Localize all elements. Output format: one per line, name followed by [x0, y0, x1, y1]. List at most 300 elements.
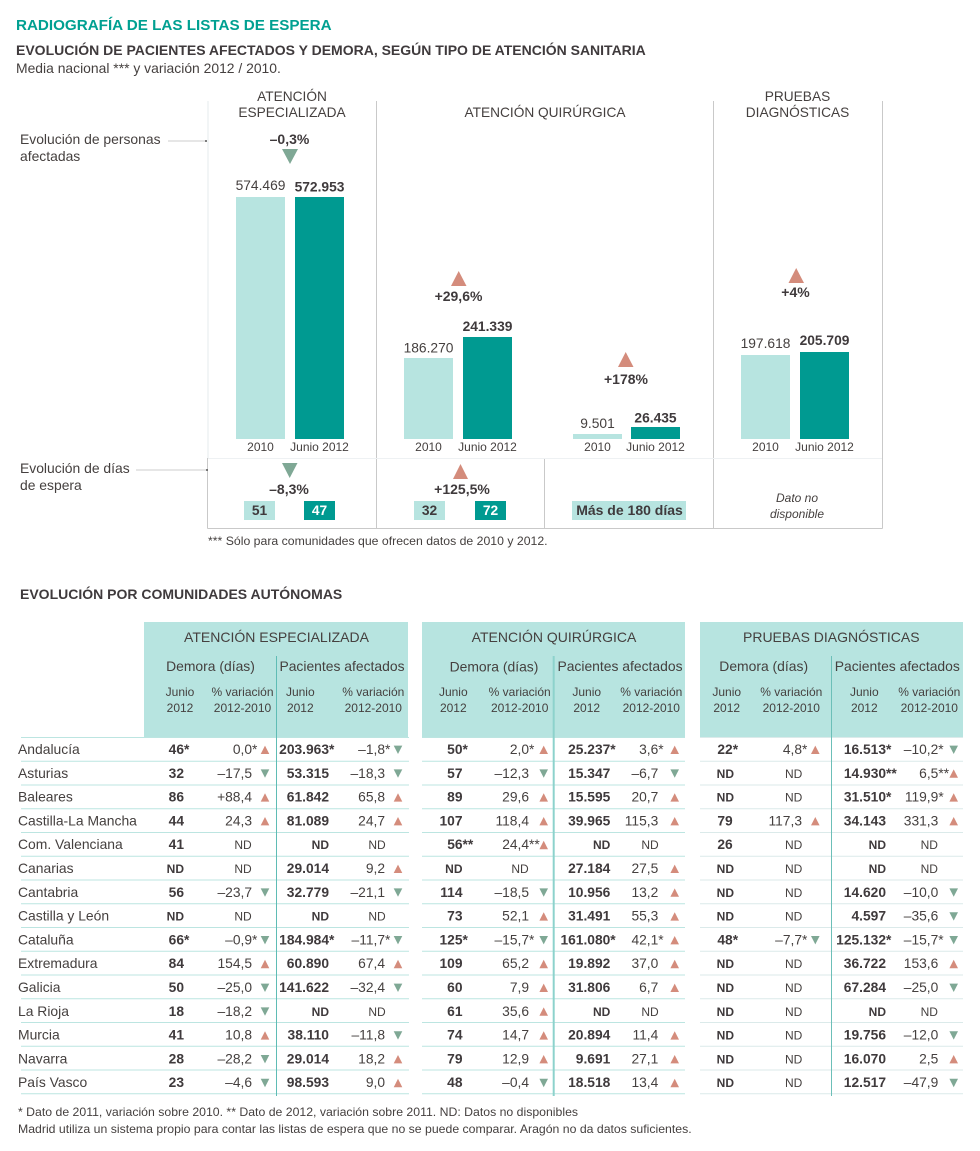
row: Andalucía: 46* — [169, 742, 190, 757]
row: Castilla-La Mancha: 39.965 — [568, 813, 611, 828]
row: Extremadura: 67,4 — [358, 956, 385, 971]
row: Murcia — [18, 1027, 958, 1043]
table header: atención especializada: Junio — [286, 685, 315, 699]
column heading: atención quirúrgica: ATENCIÓN QUIRÚRGICA — [465, 105, 626, 120]
row: Galicia: 6,7 — [639, 980, 658, 995]
row: Navarra: 18,2 — [358, 1051, 385, 1066]
row: Castilla y León: 4.597 — [851, 909, 886, 924]
row: La Rioja: –18,2 — [217, 1004, 252, 1019]
bar chart: pruebas diagnósticas: Junio 2012 — [795, 440, 854, 454]
row: Galicia: –25,0 — [904, 980, 939, 995]
row: Cantabria: –21,1 — [350, 885, 385, 900]
row: Canarias: ND — [921, 862, 938, 876]
footnotes: Madrid utiliza un sistema propio para contar las listas de espera que no se puede comparar. Aragón no da datos suficientes. — [18, 1122, 692, 1136]
row: Castilla-La Mancha: Castilla-La Mancha — [18, 812, 137, 828]
row: Castilla y León: ND — [167, 910, 184, 924]
row: Navarra: 9.691 — [576, 1051, 611, 1066]
row: Canarias: ND — [167, 862, 184, 876]
row: País Vasco: –0,4 — [502, 1075, 529, 1090]
row: País Vasco: –47,9 — [904, 1075, 939, 1090]
row: Extremadura: 60.890 — [287, 956, 329, 971]
row: Com. Valenciana: Com. Valenciana — [18, 836, 123, 852]
row: Extremadura: ND — [785, 957, 803, 971]
bar chart: atención quirúrgica, segunda serie: 26.435 — [634, 410, 677, 426]
row: Cantabria: –23,7 — [217, 885, 252, 900]
row: Extremadura: 153,6 — [904, 956, 939, 971]
row: Castilla y León: ND — [785, 910, 803, 924]
table header: atención especializada: Junio — [166, 685, 195, 699]
bar chart: atención quirúrgica: 2010 — [415, 440, 442, 454]
row: Galicia: 60 — [447, 980, 463, 995]
row: Galicia: ND — [717, 981, 734, 995]
row: Castilla-La Mancha: 118,4 — [495, 813, 529, 828]
row: Com. Valenciana: ND — [641, 838, 659, 852]
row: Canarias: ND — [785, 862, 803, 876]
row: Castilla y León: 55,3 — [631, 909, 659, 924]
row: Andalucía: 4,8* — [783, 742, 808, 757]
row: Com. Valenciana: ND — [368, 838, 386, 852]
row: Extremadura: ND — [717, 957, 734, 971]
row: Cataluña — [18, 931, 958, 947]
row: Cantabria: –10,0 — [904, 885, 939, 900]
row: Navarra: 28 — [169, 1051, 184, 1066]
días de espera: atención quirúrgica: +125,5% — [434, 481, 490, 497]
row: Baleares: 89 — [447, 790, 463, 805]
row: Com. Valenciana: ND — [593, 838, 611, 852]
row: Cataluña: –0,9* — [225, 932, 258, 947]
días de espera: atención especializada — [244, 463, 335, 520]
row: Andalucía: 203.963* — [279, 742, 335, 757]
row: Cataluña: –11,7* — [352, 932, 391, 947]
row: Asturias: 15.347 — [568, 766, 611, 781]
row: Baleares: 86 — [169, 790, 184, 805]
row: Cantabria: ND — [785, 886, 803, 900]
row: Baleares: 65,8 — [358, 790, 385, 805]
subtitle heading: EVOLUCIÓN DE PACIENTES AFECTADOS Y DEMORA, SEGÚN TIPO DE ATENCIÓN SANITARIA — [16, 41, 646, 58]
table header: atención quirúrgica: Junio — [439, 685, 468, 699]
bar chart: atención especializada: Junio 2012 — [290, 440, 349, 454]
row: Canarias: ND — [869, 862, 886, 876]
row: Cantabria: 14.620 — [844, 885, 886, 900]
días de espera: atención especializada: 47 — [312, 503, 327, 518]
row: País Vasco: 12.517 — [844, 1075, 886, 1090]
row: Castilla-La Mancha: 81.089 — [287, 813, 329, 828]
row: Navarra — [18, 1050, 958, 1066]
footnotes: * Dato de 2011, variación sobre 2010. ** Dato de 2012, variación sobre 2011. ND: Datos no disponibles — [18, 1105, 578, 1119]
table header: atención quirúrgica: 2012-2010 — [623, 701, 680, 715]
row: Com. Valenciana: 26 — [717, 837, 733, 852]
row: Castilla y León: 31.491 — [568, 909, 611, 924]
row: Navarra: 12,9 — [502, 1051, 529, 1066]
row: Cantabria: 32.779 — [287, 885, 329, 900]
row: País Vasco: ND — [785, 1076, 803, 1090]
row: Galicia: Galicia — [18, 979, 61, 995]
table header: atención quirúrgica — [422, 622, 685, 738]
row: Baleares: +88,4 — [217, 790, 252, 805]
row: Extremadura: 37,0 — [631, 956, 659, 971]
table header: atención quirúrgica: Junio — [572, 685, 601, 699]
row: Canarias: ND — [234, 862, 252, 876]
row: Cantabria: –18,5 — [494, 885, 529, 900]
footnotes — [18, 1105, 692, 1136]
row: Castilla y León: ND — [368, 910, 386, 924]
row: Canarias: 9,2 — [366, 861, 385, 876]
row: Navarra: ND — [717, 1052, 734, 1066]
table header: atención especializada: 2012-2010 — [345, 701, 402, 715]
row: La Rioja: ND — [641, 1005, 659, 1019]
table header: pruebas diagnósticas: Junio — [850, 685, 879, 699]
bar chart: pruebas diagnósticas: 197.618 — [741, 336, 791, 351]
row: Canarias: ND — [445, 862, 463, 876]
row: Galicia: –25,0 — [217, 980, 252, 995]
row: Cataluña: –7,7* — [775, 932, 808, 947]
table header: atención quirúrgica: ATENCIÓN QUIRÚRGICA — [472, 629, 637, 645]
row: Canarias: Canarias — [18, 860, 74, 876]
días de espera: atención especializada: 51 — [252, 503, 267, 518]
row: Cataluña: 125.132* — [836, 932, 892, 947]
row: Murcia: ND — [785, 1029, 803, 1043]
row: Navarra: 2,5 — [919, 1051, 939, 1066]
row: País Vasco: 18.518 — [568, 1075, 611, 1090]
row: País Vasco: 23 — [169, 1075, 184, 1090]
bar chart: atención especializada: –0,3% — [270, 131, 310, 147]
row: Murcia: 10,8 — [225, 1028, 252, 1043]
bar chart: atención quirúrgica: +29,6% — [435, 288, 483, 304]
row: Cantabria: 56 — [169, 885, 184, 900]
row: Castilla y León: 52,1 — [502, 909, 529, 924]
row: La Rioja: ND — [717, 1005, 734, 1019]
bar chart: pruebas diagnósticas: 2010 — [752, 440, 779, 454]
row: Baleares — [18, 789, 958, 805]
row: La Rioja: 61 — [447, 1004, 463, 1019]
table header: pruebas diagnósticas: Junio — [712, 685, 741, 699]
row: Castilla-La Mancha: 44 — [169, 813, 184, 828]
row: Baleares: 20,7 — [631, 790, 658, 805]
table header: pruebas diagnósticas: 2012-2010 — [901, 701, 958, 715]
row: País Vasco: 9,0 — [366, 1075, 385, 1090]
row: Canarias: 27,5 — [631, 861, 659, 876]
row: Asturias: 53.315 — [287, 766, 329, 781]
row: Murcia: 14,7 — [502, 1028, 529, 1043]
row: Cataluña: 161.080* — [560, 932, 616, 947]
row: Castilla-La Mancha — [18, 812, 958, 828]
row: Asturias: 14.930** — [844, 766, 897, 781]
row: Galicia — [18, 979, 958, 995]
row: Com. Valenciana: ND — [234, 838, 252, 852]
row: Baleares: 15.595 — [568, 790, 611, 805]
row: Navarra: 79 — [447, 1051, 463, 1066]
días de espera: atención quirúrgica — [414, 464, 506, 520]
row: La Rioja: La Rioja — [18, 1003, 69, 1019]
row: Com. Valenciana: ND — [869, 838, 886, 852]
table header: pruebas diagnósticas: Pacientes afectados — [835, 658, 960, 674]
row: La Rioja: ND — [921, 1005, 938, 1019]
row: Cantabria: Cantabria — [18, 884, 79, 900]
row: Andalucía: 16.513* — [844, 742, 892, 757]
row: Asturias: 57 — [447, 766, 463, 781]
row: La Rioja: ND — [593, 1005, 611, 1019]
row: Castilla-La Mancha: 34.143 — [844, 813, 886, 828]
row: Baleares: Baleares — [18, 789, 73, 805]
row: La Rioja: ND — [368, 1005, 386, 1019]
row: Castilla y León: 73 — [447, 909, 463, 924]
row: Asturias — [18, 765, 958, 781]
row: La Rioja: ND — [785, 1005, 803, 1019]
table header: atención especializada: ATENCIÓN ESPECIALIZADA — [184, 629, 370, 645]
row: Castilla-La Mancha: 107 — [439, 813, 463, 828]
row: Murcia: 19.756 — [844, 1028, 886, 1043]
bar chart: atención quirúrgica — [404, 271, 517, 454]
row: Baleares: 119,9* — [905, 790, 944, 805]
row: Cataluña: 66* — [169, 932, 190, 947]
row: Baleares: ND — [785, 791, 803, 805]
row: Navarra: 27,1 — [631, 1051, 658, 1066]
row: Asturias: 6,5** — [919, 766, 950, 781]
row: Cataluña: –15,7* — [494, 932, 535, 947]
heading: comunidades autónomas: EVOLUCIÓN POR COMUNIDADES AUTÓNOMAS — [20, 585, 342, 602]
bar chart: atención quirúrgica, segunda serie: 2010 — [584, 440, 611, 454]
row: País Vasco: 98.593 — [287, 1075, 329, 1090]
row: Galicia: 50 — [169, 980, 184, 995]
label: días de espera: Evolución de días — [20, 460, 130, 476]
row: Andalucía: 0,0* — [233, 742, 258, 757]
row: Murcia: 11,4 — [632, 1028, 659, 1043]
row: Asturias: –6,7 — [631, 766, 658, 781]
bar chart: atención quirúrgica: Junio 2012 — [458, 440, 517, 454]
table header: atención quirúrgica: Demora (días) — [450, 658, 538, 674]
row: Com. Valenciana: ND — [785, 838, 803, 852]
row: Castilla-La Mancha: 115,3 — [625, 813, 659, 828]
row: Castilla-La Mancha: 24,3 — [225, 813, 252, 828]
row: Murcia: 38.110 — [288, 1028, 329, 1043]
table header: atención especializada: Demora (días) — [166, 658, 255, 674]
bar chart: atención quirúrgica: 186.270 — [404, 340, 454, 356]
row: Extremadura — [18, 955, 958, 971]
row: Castilla y León: –35,6 — [904, 909, 939, 924]
column heading: atención especializada: ESPECIALIZADA — [238, 105, 346, 120]
bar chart: pruebas diagnósticas: +4% — [781, 284, 810, 300]
row: Andalucía: 22* — [717, 742, 739, 757]
row: Castilla-La Mancha: 24,7 — [358, 813, 385, 828]
row: Com. Valenciana: 56** — [447, 837, 474, 852]
días de espera: atención especializada: –8,3% — [269, 481, 309, 497]
bar chart: pruebas diagnósticas: 205.709 — [800, 333, 850, 348]
row: Galicia: 31.806 — [568, 980, 611, 995]
row: Navarra: 16.070 — [844, 1051, 886, 1066]
row: Baleares: 29,6 — [502, 790, 529, 805]
label: personas afectadas: Evolución de personas — [20, 131, 161, 147]
row: Cantabria: 13,2 — [631, 885, 658, 900]
table header: pruebas diagnósticas — [700, 622, 963, 738]
bar chart: atención quirúrgica, segunda serie: Junio 2012 — [626, 440, 685, 454]
días de espera: más de 180 días: Más de 180 días — [576, 502, 683, 518]
row: Castilla y León: Castilla y León — [18, 908, 109, 924]
table header: pruebas diagnósticas: 2012 — [713, 701, 740, 715]
row: Asturias: ND — [785, 767, 803, 781]
footnote: chart: *** Sólo para comunidades que ofrecen datos de 2010 y 2012. — [208, 534, 548, 548]
row: Extremadura: 154,5 — [217, 956, 252, 971]
row: Asturias: 32 — [169, 766, 184, 781]
row: Canarias: 27.184 — [568, 861, 611, 876]
column heading: pruebas diagnósticas: PRUEBAS — [765, 89, 830, 104]
row: La Rioja: 18 — [169, 1004, 184, 1019]
días de espera: dato no disponible: Dato no — [776, 491, 818, 505]
row: Murcia: 41 — [169, 1028, 184, 1043]
column heading: atención especializada — [238, 89, 346, 120]
row: Cantabria — [18, 884, 958, 900]
column heading: pruebas diagnósticas: DIAGNÓSTICAS — [746, 105, 849, 120]
row: Cataluña: Cataluña — [18, 931, 74, 947]
row: Andalucía: 2,0* — [510, 742, 535, 757]
row: Galicia: 7,9 — [510, 980, 529, 995]
bar chart: atención quirúrgica, segunda serie — [573, 352, 685, 454]
row: País Vasco: 48 — [447, 1075, 463, 1090]
row: Cantabria: ND — [717, 886, 734, 900]
row: Extremadura: 65,2 — [502, 956, 529, 971]
row: Andalucía: –10,2* — [904, 742, 944, 757]
row: Com. Valenciana: 41 — [169, 837, 184, 852]
row: Navarra: –28,2 — [217, 1051, 252, 1066]
row: La Rioja: ND — [312, 1005, 329, 1019]
row: Cataluña: 184.984* — [279, 932, 335, 947]
row: Andalucía: 50* — [447, 742, 469, 757]
subtitle note: Media nacional *** y variación 2012 / 2010. — [16, 60, 281, 76]
table header: atención quirúrgica: % variación — [489, 685, 551, 699]
column heading: atención especializada: ATENCIÓN — [257, 89, 327, 104]
bar chart: atención quirúrgica, segunda serie: 9.501 — [580, 416, 615, 431]
row: Andalucía: 3,6* — [639, 742, 664, 757]
row: Extremadura: 109 — [439, 956, 463, 971]
row: Extremadura: 19.892 — [568, 956, 611, 971]
row: Com. Valenciana: ND — [921, 838, 938, 852]
row: País Vasco: –4,6 — [225, 1075, 252, 1090]
table header: atención quirúrgica: % variación — [620, 685, 682, 699]
row: País Vasco: País Vasco — [18, 1074, 88, 1090]
row: Andalucía: –1,8* — [358, 742, 391, 757]
row: Andalucía: 25.237* — [568, 742, 616, 757]
row: País Vasco: 13,4 — [631, 1075, 659, 1090]
row: Murcia: ND — [717, 1029, 734, 1043]
row: Asturias: Asturias — [18, 765, 68, 781]
table header: atención quirúrgica: 2012 — [573, 701, 600, 715]
row: La Rioja — [18, 1003, 938, 1019]
row: Cataluña: 125* — [440, 932, 469, 947]
row: Murcia: –12,0 — [904, 1028, 939, 1043]
bar chart: pruebas diagnósticas — [741, 268, 854, 454]
row: Asturias: ND — [717, 767, 734, 781]
row: Canarias: ND — [511, 862, 529, 876]
table header: pruebas diagnósticas: Demora (días) — [719, 658, 808, 674]
row: Murcia: Murcia — [18, 1027, 60, 1043]
row: Galicia: 67.284 — [844, 980, 886, 995]
bar chart: atención especializada: 2010 — [247, 440, 274, 454]
row: Navarra: ND — [785, 1052, 803, 1066]
row: Navarra: Navarra — [18, 1050, 68, 1066]
row: Castilla-La Mancha: 331,3 — [904, 813, 939, 828]
row: Murcia: –11,8 — [351, 1028, 385, 1043]
row: Cantabria: 114 — [440, 885, 463, 900]
bar chart: atención quirúrgica: 241.339 — [463, 319, 513, 334]
bar chart: atención especializada: 574.469 — [236, 178, 286, 193]
table header: atención especializada: 2012 — [287, 701, 314, 715]
row: Castilla y León: ND — [234, 910, 252, 924]
row: Navarra: 29.014 — [287, 1051, 329, 1066]
table header: atención especializada: 2012-2010 — [214, 701, 272, 715]
row: Andalucía: Andalucía — [18, 741, 80, 757]
row: Baleares: ND — [717, 791, 734, 805]
row: Castilla-La Mancha: 79 — [717, 813, 733, 828]
row: Com. Valenciana: 24,4** — [502, 837, 540, 852]
row: Baleares: 31.510* — [844, 790, 892, 805]
row: Extremadura: 84 — [169, 956, 184, 971]
bar chart: atención especializada: 572.953 — [295, 180, 345, 194]
panel: national chart — [20, 89, 882, 528]
row: La Rioja: 35,6 — [502, 1004, 529, 1019]
table header: atención especializada: % variación — [211, 685, 274, 699]
row: Asturias: –18,3 — [350, 766, 385, 781]
row: Murcia: 20.894 — [568, 1028, 611, 1043]
row: País Vasco — [18, 1074, 958, 1090]
table header: atención especializada — [144, 622, 408, 738]
table header: pruebas diagnósticas: PRUEBAS DIAGNÓSTICAS — [743, 629, 920, 645]
label: personas afectadas: afectadas — [20, 148, 80, 164]
días de espera: atención quirúrgica: 72 — [483, 503, 498, 518]
row: Com. Valenciana — [18, 836, 938, 852]
table header: pruebas diagnósticas: % variación — [760, 685, 822, 699]
días de espera: atención quirúrgica: 32 — [422, 503, 437, 518]
row: Galicia: –32,4 — [350, 980, 385, 995]
table header: pruebas diagnósticas: % variación — [898, 685, 960, 699]
row: Andalucía — [18, 741, 958, 757]
bar chart: atención quirúrgica, segunda serie: +178% — [604, 371, 649, 387]
row: Canarias — [18, 860, 938, 876]
row: Cantabria: 10.956 — [568, 885, 611, 900]
row: Extremadura: 36.722 — [844, 956, 886, 971]
bar chart: atención especializada — [236, 131, 349, 454]
row: Asturias: –12,3 — [494, 766, 529, 781]
title: RADIOGRAFÍA DE LAS LISTAS DE ESPERA — [16, 17, 332, 34]
row: Murcia: 74 — [447, 1028, 463, 1043]
table header: atención quirúrgica: Pacientes afectados — [557, 658, 683, 674]
row: La Rioja: ND — [869, 1005, 886, 1019]
table header: pruebas diagnósticas: 2012 — [851, 701, 878, 715]
días de espera: dato no disponible — [770, 491, 824, 521]
row: Cataluña: 48* — [717, 932, 739, 947]
label: personas afectadas — [20, 131, 207, 164]
table header: atención especializada: 2012 — [167, 701, 194, 715]
días de espera: dato no disponible: disponible — [770, 507, 824, 521]
row: Castilla y León: ND — [717, 910, 734, 924]
row: Baleares: 61.842 — [287, 790, 329, 805]
table header: atención especializada: Pacientes afectados — [279, 658, 405, 674]
row: Galicia: ND — [785, 981, 803, 995]
row: Castilla-La Mancha: 117,3 — [768, 813, 802, 828]
table header: pruebas diagnósticas: 2012-2010 — [763, 701, 820, 715]
table header: atención quirúrgica: 2012-2010 — [491, 701, 549, 715]
row: Cataluña: –15,7* — [904, 932, 944, 947]
row: Castilla y León: ND — [312, 910, 329, 924]
table header: atención especializada: % variación — [342, 685, 404, 699]
row: Extremadura: Extremadura — [18, 955, 98, 971]
row: Com. Valenciana: ND — [312, 838, 329, 852]
row: Canarias: ND — [717, 862, 734, 876]
table header: atención quirúrgica: 2012 — [440, 701, 467, 715]
label: días de espera — [20, 460, 208, 493]
column heading: pruebas diagnósticas — [746, 89, 849, 120]
row: País Vasco: ND — [717, 1076, 734, 1090]
row: Castilla y León — [18, 908, 958, 924]
row: Asturias: –17,5 — [217, 766, 252, 781]
